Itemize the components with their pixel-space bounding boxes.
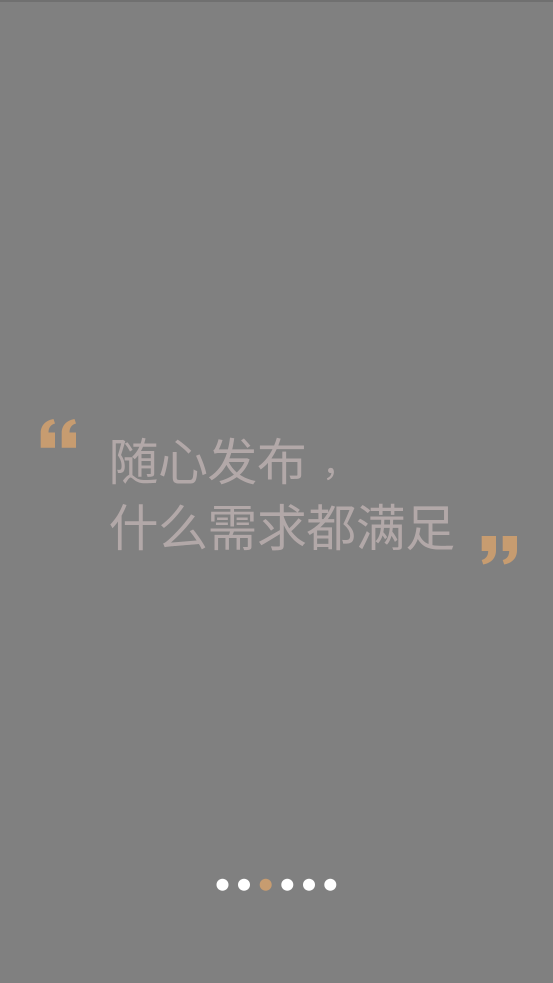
text line 2: 什么需求都满足 xyxy=(108,501,455,557)
text line 1 comma: ， xyxy=(322,442,358,484)
text line 1: 随心发布 xyxy=(108,435,306,491)
quote text block xyxy=(108,435,455,557)
